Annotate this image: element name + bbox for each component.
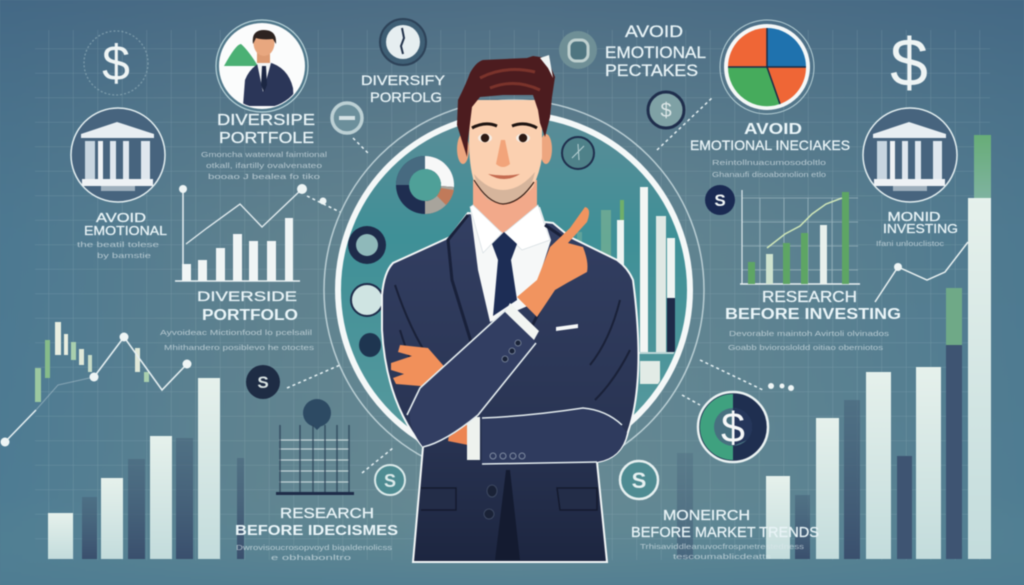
jacket pockets	[421, 488, 597, 510]
hair spike	[540, 55, 553, 78]
heading: avoid emotional mistakes	[690, 121, 850, 179]
shirt	[470, 207, 551, 322]
heading: avoid emotional left: AVOID	[96, 210, 146, 225]
lower cuff	[467, 417, 480, 460]
pie chart	[720, 20, 814, 114]
neck	[473, 180, 537, 233]
icons: inner left circles	[348, 226, 386, 357]
heading: research before investing: BEFORE INVESTING	[725, 306, 901, 323]
heading: research before investing	[725, 289, 901, 352]
icon: dollar right: $	[890, 25, 928, 101]
heading: before market trends: Trhisaviddleanuvocfrospnetrestedness	[640, 542, 804, 551]
heading: research before decisions: RESEARCH	[280, 505, 374, 522]
heading: monid investing: INVESTING	[883, 221, 958, 236]
heading: monid investing	[876, 209, 958, 248]
icon: small ring left	[332, 103, 362, 133]
heading: before market trends: tescoumablicdeatts	[673, 552, 771, 561]
icon: large dollar coin	[698, 392, 768, 462]
upper forearm	[410, 309, 536, 447]
ear right	[540, 134, 552, 164]
jacket buttons	[484, 485, 497, 519]
heading: monid investing: Ifani unlouclistoc	[876, 239, 944, 248]
heading: avoid emotional top right: EMOTIONAL	[605, 43, 706, 62]
heading: diversify top center	[361, 72, 446, 105]
icon: bank right	[863, 108, 957, 202]
icon: light coin lower left	[375, 465, 405, 495]
lower sleeve buttons	[490, 453, 525, 459]
heading: research before decisions: e obhabonltro	[271, 553, 351, 562]
heading: avoid emotional mistakes: Ghanaufi disoabonolion etlo	[712, 170, 826, 179]
heading: before market trends: MONEIRCH	[663, 507, 750, 524]
heading: diversify top center: PORFOLG	[370, 89, 442, 105]
heading: research before decisions: BEFORE IDECISMES	[235, 522, 398, 539]
lower forearm	[482, 408, 627, 464]
icon: clock top	[380, 19, 426, 65]
heading: avoid emotional top right: PECTAKES	[605, 61, 698, 80]
heading: avoid emotional top right: AVOID	[625, 22, 683, 41]
icon: portrait badge	[216, 20, 308, 112]
mouth	[488, 174, 520, 179]
heading: diverside portfolo: DIVERSIDE	[197, 288, 297, 304]
upper sleeve buttons	[502, 340, 521, 362]
left bottom bar chart	[48, 378, 244, 559]
icon: emblem top right	[559, 31, 597, 69]
person illustration	[382, 55, 638, 562]
heading: diverside portfolo	[160, 288, 314, 352]
lapels	[448, 215, 567, 350]
face	[469, 100, 542, 204]
jaw line	[474, 180, 534, 204]
text block: diversify description: booao J bealea fo tiko	[208, 172, 320, 181]
central circle	[324, 100, 704, 480]
heading: research before investing: Goabb bviorosloldd oitiao oberniotos	[728, 343, 883, 352]
stubble shade	[474, 172, 535, 203]
heading: avoid emotional top right	[605, 22, 706, 80]
ear left	[457, 134, 469, 164]
icon: coin ring top right: $	[660, 100, 672, 122]
heading: avoid emotional left: by bamstie	[97, 251, 151, 260]
nose	[496, 140, 510, 167]
eyebrows	[472, 124, 537, 128]
right bottom bar chart	[677, 135, 991, 559]
heading: avoid emotional mistakes: AVOID	[744, 121, 802, 138]
jacket	[382, 213, 638, 562]
heading: avoid emotional left	[77, 210, 167, 260]
icon: light coin lower left: S	[384, 471, 396, 491]
text block: diversify description: Gmoncha waterwal faimtional	[201, 150, 327, 159]
hand under arm	[448, 417, 468, 445]
lower forearm highlights	[482, 408, 622, 464]
heading: diversify portfolio top	[217, 112, 315, 147]
heading: diversify top center: DIVERSIFY	[361, 72, 446, 88]
hair	[457, 56, 555, 157]
icon: dollar left	[84, 31, 148, 95]
icon: light coin lower right	[620, 461, 658, 499]
left candlestick line chart	[0, 322, 192, 446]
upper cuff	[505, 303, 539, 340]
tie	[492, 232, 517, 316]
hair highlight	[480, 70, 540, 90]
heading: research before investing: Devorable maintoh Avirtoli olvinados	[729, 329, 889, 338]
heading: diversify portfolio top: DIVERSIPE	[217, 112, 315, 129]
icon: large dollar coin: $	[721, 404, 745, 452]
heading: before market trends: BEFORE MARKET TRENDS	[631, 524, 819, 541]
jacket folds	[395, 285, 630, 400]
heading: diverside portfolo: PORTFOLO	[202, 307, 298, 324]
icon: small dial	[562, 137, 594, 169]
dashed connector lines	[287, 97, 763, 473]
text block: diversify description: otkall, ifartilly ovalvenateo	[206, 161, 322, 170]
icon: dark coin lower left: S	[257, 373, 269, 392]
heading: diverside portfolo: Mhithandero posiblevo he otoctes	[164, 343, 314, 352]
jacket opening	[495, 470, 520, 560]
upper forearm highlights	[407, 309, 536, 447]
collar	[470, 205, 550, 253]
left top line and bar chart	[175, 184, 326, 281]
icon: bank left	[71, 108, 165, 202]
chart inside circle	[576, 186, 676, 385]
heading: before market trends	[631, 507, 819, 561]
heading: monid investing: MONID	[888, 209, 940, 224]
eyes	[478, 134, 530, 142]
heading: research before decisions	[235, 505, 398, 562]
donut chart	[396, 156, 454, 214]
heading: avoid emotional left: EMOTIONAL	[84, 223, 167, 238]
icon: dollar badge dark top right	[705, 185, 735, 215]
icon: grid chart with pin	[276, 399, 354, 495]
heading: avoid emotional mistakes: EMOTIONAL INECIAKES	[690, 137, 850, 153]
icon: dark coin lower left	[246, 365, 280, 399]
heading: avoid emotional mistakes: Reintollnuacumosodoltlo	[712, 158, 826, 167]
pocket square	[556, 324, 578, 331]
heading: research before decisions: Dwrovisoucrosopvoyd biqaldenolicss	[236, 543, 392, 552]
icon: light coin lower right: S	[632, 468, 646, 493]
heading: diversify portfolio top: PORTFOLE	[219, 130, 314, 147]
heading: avoid emotional left: the beatil tolese	[77, 240, 159, 249]
icon: dollar badge dark top right: S	[714, 191, 726, 210]
left hand fingers	[391, 345, 449, 386]
icon: coin ring top right	[648, 92, 684, 128]
heading: research before investing: RESEARCH	[762, 289, 857, 306]
text block: diversify description	[201, 150, 327, 181]
right hand pointing	[517, 207, 589, 317]
right top bar chart	[740, 190, 860, 284]
heading: diverside portfolo: Ayvoideac Mictionfood lo pcelsalil	[160, 328, 312, 337]
icon: dollar left: $	[102, 35, 130, 91]
